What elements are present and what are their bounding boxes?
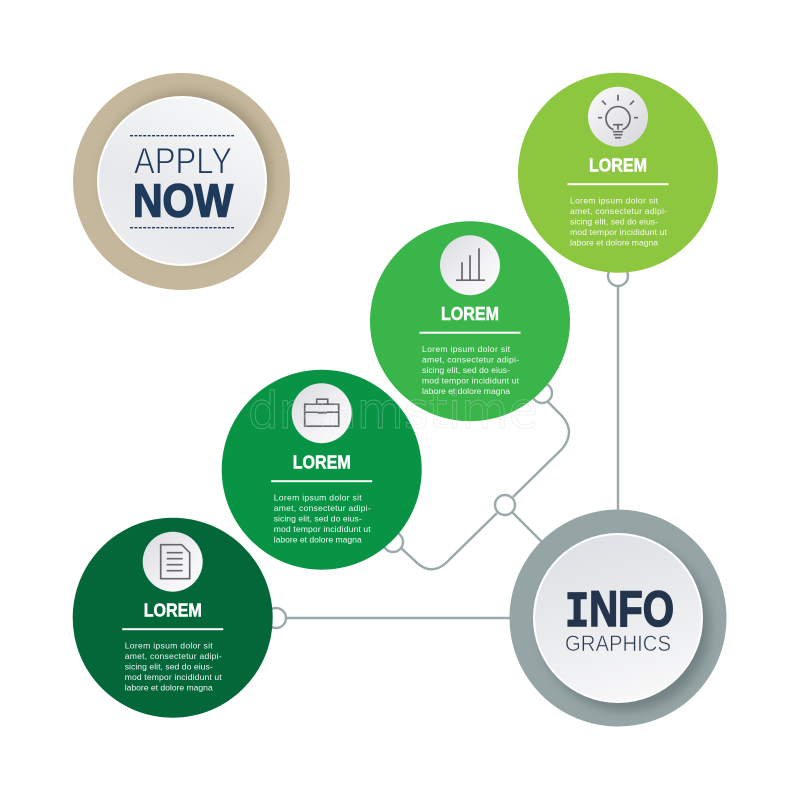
body text: mod tempor incididunt ut — [274, 524, 371, 534]
heading: LOREM — [441, 304, 499, 324]
icon: briefcase — [292, 383, 352, 443]
body text: amet, consectetur adipi- — [274, 503, 371, 513]
badge: apply now — [73, 73, 290, 290]
body text: sicing elit, sed do eius- — [125, 662, 213, 672]
rule — [568, 183, 668, 185]
heading: LOREM — [589, 156, 647, 176]
body text: mod tempor incididunt ut — [570, 227, 668, 237]
panel: lorem dark green — [73, 518, 273, 718]
icon: light bulb — [588, 87, 648, 147]
badge: infographics — [510, 510, 726, 726]
icon: bar chart — [440, 235, 500, 295]
now label: NOW — [133, 175, 234, 227]
heading: LOREM — [144, 601, 202, 621]
body text: Lorem ipsum dolor sit — [274, 493, 362, 503]
body text: labore et dolore magna — [274, 535, 362, 545]
body text: amet, consectetur adipi- — [570, 206, 667, 216]
body text: Lorem ipsum dolor sit — [422, 344, 511, 354]
graphics label: GRAPHICS — [565, 631, 671, 656]
rule — [122, 628, 223, 630]
body text: sicing elit, sed do eius- — [274, 514, 362, 524]
info label: INFO — [565, 581, 674, 642]
body text: labore et dolore magna — [422, 386, 510, 396]
body text: Lorem ipsum dolor sit — [570, 196, 659, 206]
body text: mod tempor incididunt ut — [125, 672, 222, 682]
panel: lorem green — [222, 370, 422, 570]
panel: lorem medium green — [370, 221, 570, 421]
icon: document — [143, 532, 203, 592]
connector: curved line through middle circles — [383, 383, 569, 569]
body text: labore et dolore magna — [570, 238, 658, 248]
body text: mod tempor incididunt ut — [422, 376, 520, 386]
heading: LOREM — [293, 453, 351, 473]
body text: amet, consectetur adipi- — [422, 355, 519, 365]
watermark: dreamstime — [248, 382, 538, 440]
rule — [271, 480, 372, 482]
rule — [420, 332, 520, 334]
panel: lorem light green — [518, 73, 718, 273]
body text: amet, consectetur adipi- — [125, 651, 222, 661]
body text: labore et dolore magna — [125, 683, 213, 693]
body text: sicing elit, sed do eius- — [422, 365, 510, 375]
body text: sicing elit, sed do eius- — [570, 217, 658, 227]
connector: bottom-left circle to info — [266, 608, 512, 628]
body text: Lorem ipsum dolor sit — [125, 641, 213, 651]
connector: top circle to info — [608, 266, 628, 512]
apply label: APPLY — [134, 139, 232, 181]
